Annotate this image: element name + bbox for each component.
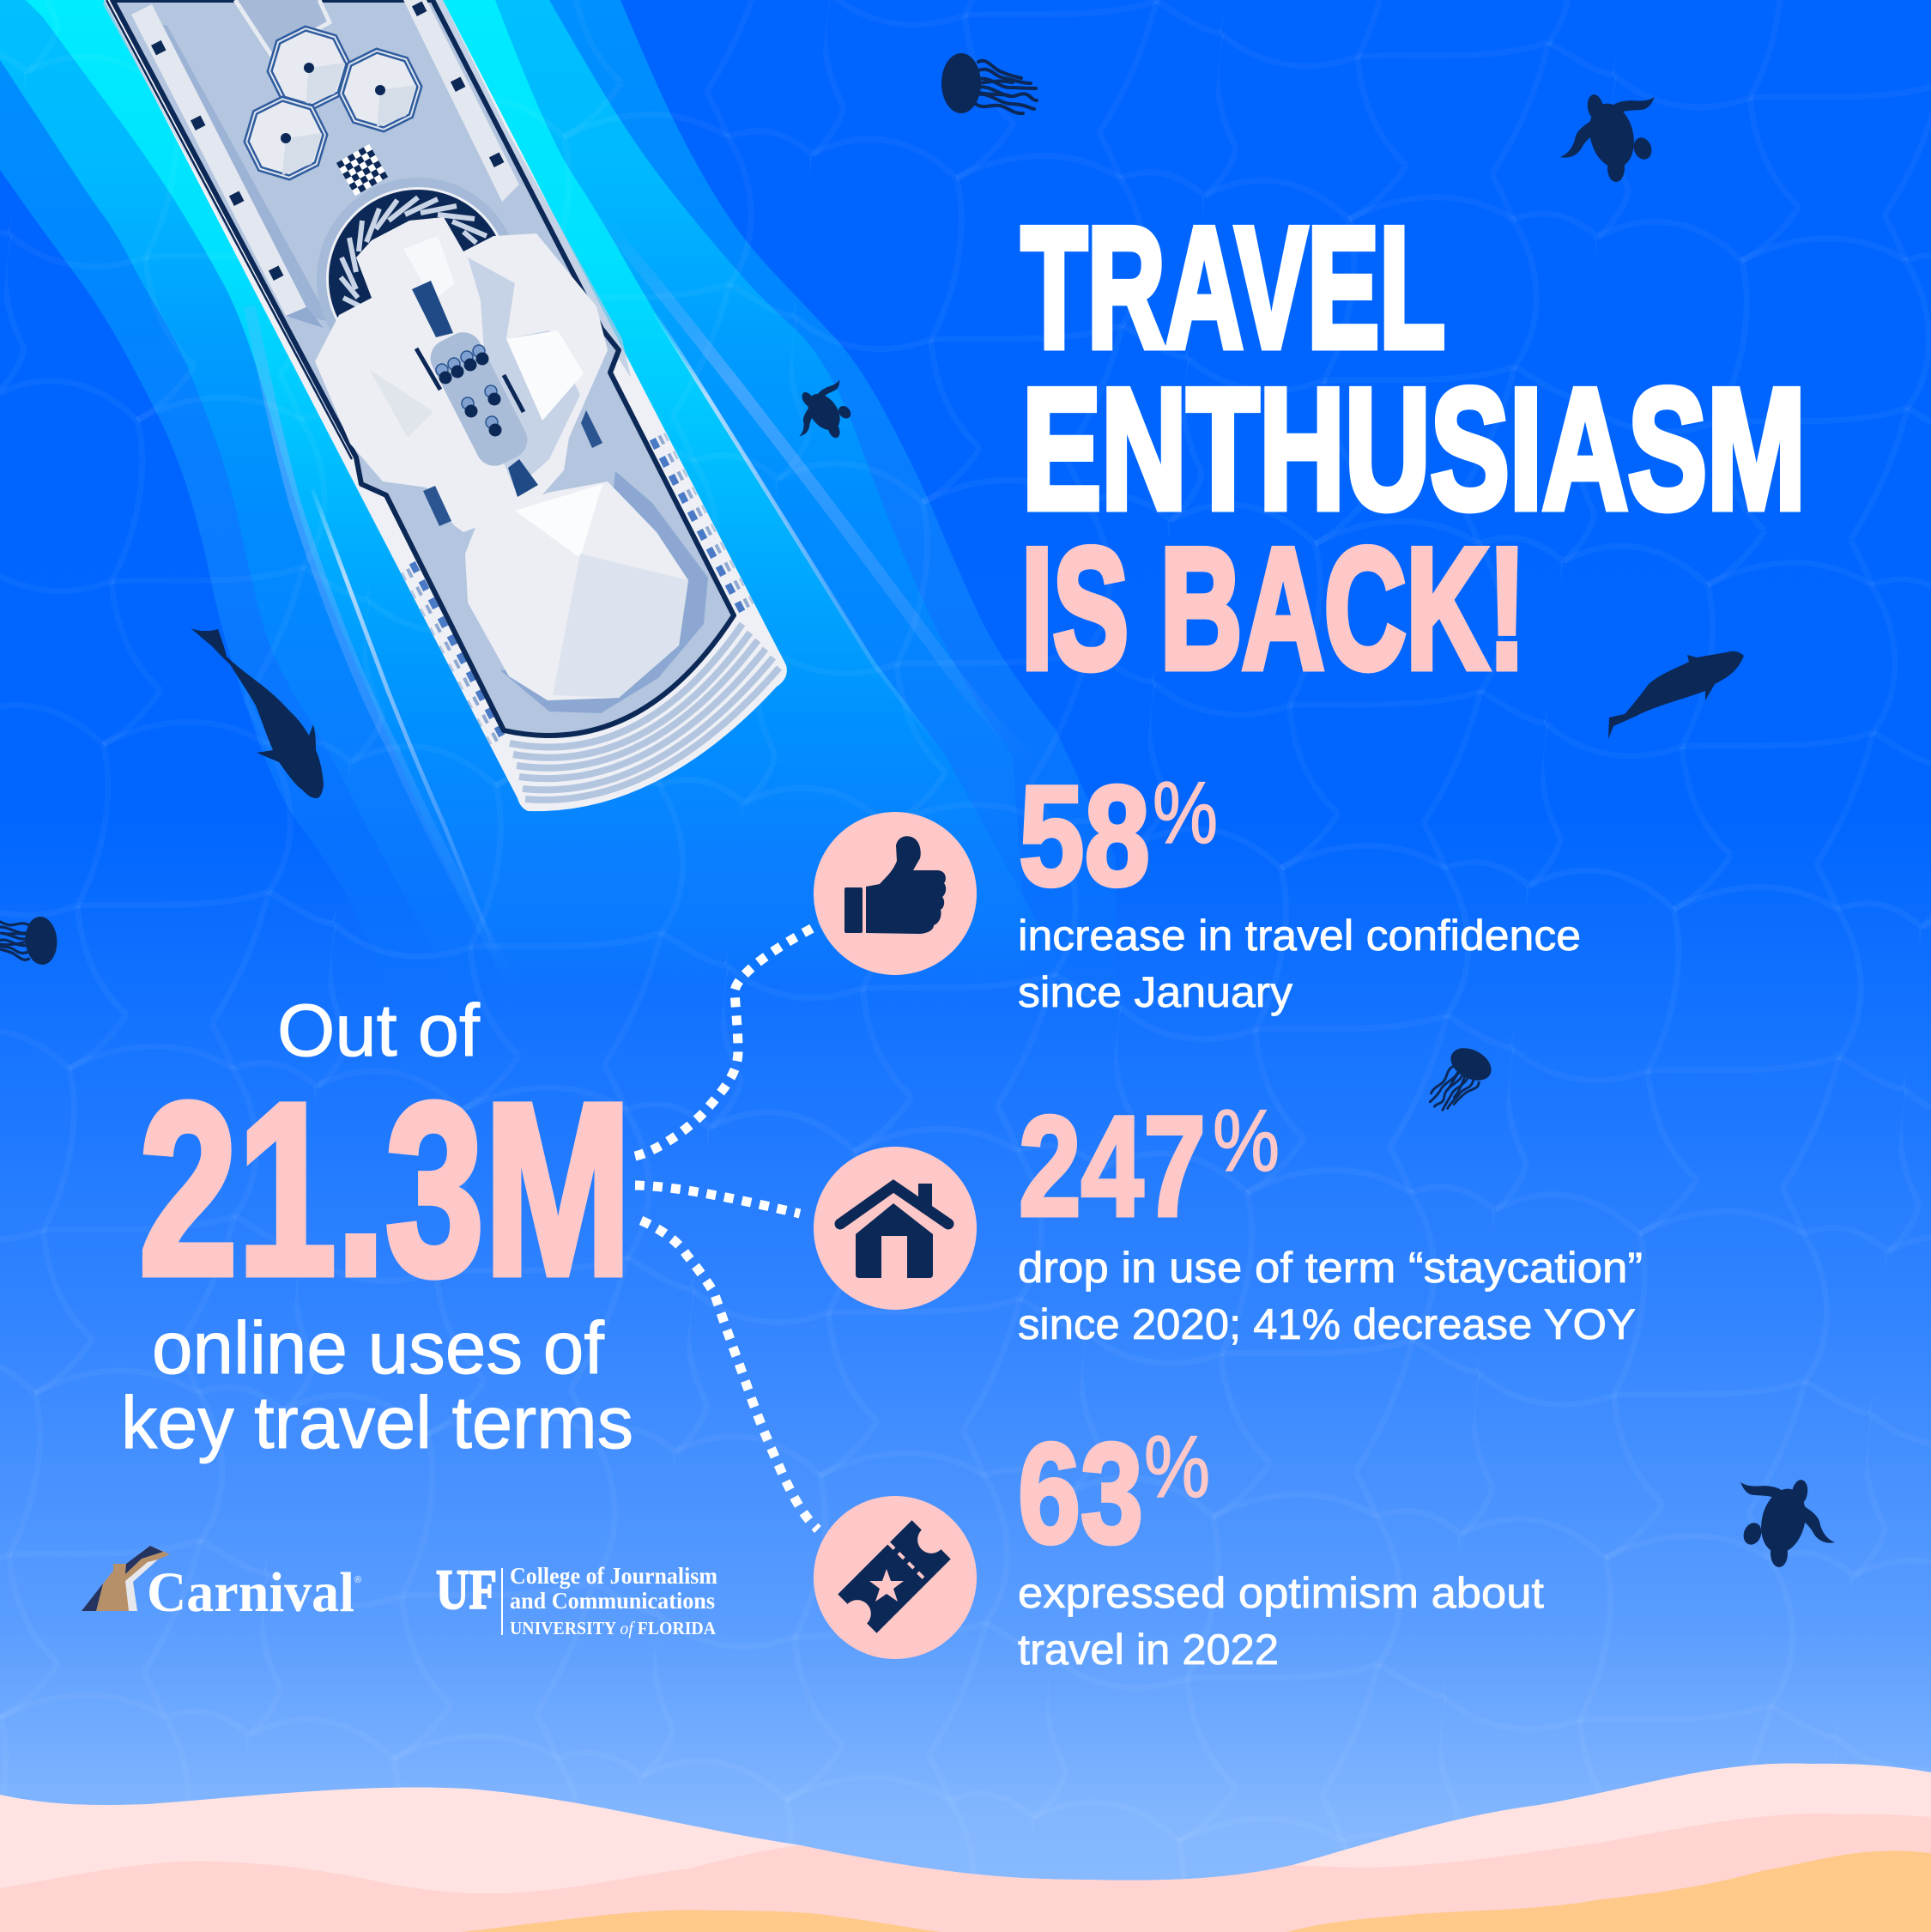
stat: 58% bbox=[814, 757, 1581, 1016]
stair grill right bbox=[581, 410, 602, 448]
cruise ship bbox=[103, 0, 787, 811]
description line 2: since January bbox=[1018, 968, 1292, 1016]
registered: ® bbox=[354, 1575, 361, 1585]
midship structure bbox=[315, 217, 608, 532]
dark stripe top bbox=[412, 281, 453, 337]
stat: 247% bbox=[814, 1087, 1643, 1348]
title bbox=[1021, 192, 1806, 705]
turtle: top right bbox=[1560, 94, 1655, 182]
big number: 21.3M bbox=[139, 1053, 632, 1326]
key travel terms: key travel terms bbox=[121, 1382, 633, 1464]
funnel tower bbox=[424, 326, 534, 472]
stair grill left bbox=[423, 486, 451, 526]
ship wake bbox=[0, 0, 1116, 1030]
funnel bbox=[82, 1546, 170, 1611]
sand layer: foam bbox=[0, 1764, 1931, 1932]
percent: % bbox=[1144, 1418, 1210, 1516]
parasols bbox=[243, 25, 423, 181]
tongue bright panel bbox=[403, 236, 455, 300]
jellyfish: left edge bbox=[0, 916, 58, 969]
fish: right bbox=[1608, 651, 1744, 739]
main deck bbox=[112, 0, 734, 736]
icon: ticket bbox=[814, 1496, 977, 1659]
connector to thumbs up bbox=[635, 924, 820, 1156]
description line 1: expressed optimism about bbox=[1018, 1569, 1544, 1617]
divider bbox=[501, 1568, 503, 1635]
dome shadow on deck bbox=[500, 471, 708, 713]
icon: house bbox=[814, 1147, 977, 1310]
side windows left bbox=[401, 561, 505, 745]
outer thin rail bbox=[106, 0, 352, 459]
wake light streaks bbox=[250, 217, 1043, 987]
stern deck lines bbox=[510, 624, 779, 800]
left deck strip bbox=[131, 4, 306, 316]
arch slats bbox=[341, 197, 487, 306]
connector to house bbox=[635, 1185, 800, 1214]
communications: and Communications bbox=[510, 1588, 715, 1614]
turtle: bottom right bbox=[1740, 1479, 1835, 1567]
online uses: online uses of bbox=[152, 1307, 605, 1390]
description line 2: travel in 2022 bbox=[1018, 1626, 1279, 1674]
logo: UF College of Journalism bbox=[436, 1559, 717, 1638]
dome bright facet bbox=[515, 484, 602, 558]
deck markers bbox=[151, 1, 504, 281]
arch rim bbox=[317, 178, 519, 380]
jellyfish: top bbox=[941, 53, 1037, 113]
big stern dome bbox=[465, 481, 688, 700]
strip end shadow bbox=[286, 307, 324, 328]
description line 1: increase in travel confidence bbox=[1018, 911, 1581, 960]
sand layer: wet bbox=[0, 1814, 1931, 1932]
university: UNIVERSITY of FLORIDA bbox=[510, 1618, 717, 1638]
funnel light stripe bbox=[125, 1560, 158, 1611]
callout: 21.3M bbox=[121, 990, 633, 1464]
midship soft panel bbox=[369, 369, 433, 438]
side windows right bbox=[650, 433, 754, 613]
dark stripe bottom bbox=[508, 459, 538, 497]
stat: 63% bbox=[814, 1414, 1544, 1674]
logo: Carnival bbox=[82, 1546, 361, 1624]
jellyfish: middle right bbox=[1426, 1042, 1497, 1123]
fish: left bbox=[191, 628, 324, 798]
percent: % bbox=[1153, 764, 1218, 862]
funnel shade bbox=[82, 1546, 163, 1611]
midship shading bbox=[468, 257, 580, 489]
number: 247 bbox=[1019, 1087, 1206, 1246]
sand layer: dry right bbox=[1286, 1850, 1931, 1932]
number: 58 bbox=[1019, 757, 1150, 916]
hull bbox=[104, 0, 787, 811]
percent: % bbox=[1213, 1092, 1280, 1190]
out of: Out of bbox=[277, 990, 481, 1072]
dome shaded facet bbox=[553, 554, 688, 698]
icon: thumbs up bbox=[814, 812, 977, 975]
funnels bbox=[436, 345, 501, 436]
arch bbox=[329, 190, 507, 368]
title line 1: TRAVEL bbox=[1021, 192, 1445, 384]
arch white edge bbox=[326, 187, 510, 371]
title line 3: IS BACK! bbox=[1021, 513, 1526, 705]
pool outline bbox=[235, 0, 330, 55]
left strip shadow bbox=[150, 21, 330, 322]
turtle: by the ship bbox=[784, 378, 859, 451]
description line 2: since 2020; 41% decrease YOY bbox=[1018, 1300, 1636, 1348]
wordmark: Carnival bbox=[147, 1561, 354, 1624]
tower side rails bbox=[416, 348, 524, 412]
dotted connector lines bbox=[635, 924, 820, 1529]
right deck strip bbox=[403, 0, 519, 202]
UF mark: UF bbox=[436, 1559, 497, 1621]
description line 1: drop in use of term “staycation” bbox=[1018, 1244, 1643, 1292]
lifeboat edge shading bbox=[103, 0, 631, 459]
connector to ticket bbox=[641, 1220, 818, 1529]
college name: College of Journalism bbox=[510, 1563, 717, 1589]
sand shore bbox=[0, 1764, 1931, 1932]
checkerboard bbox=[336, 144, 388, 196]
number: 63 bbox=[1018, 1414, 1143, 1573]
sand layer: dry left bbox=[462, 1910, 941, 1932]
midship bright panel bbox=[506, 330, 584, 421]
